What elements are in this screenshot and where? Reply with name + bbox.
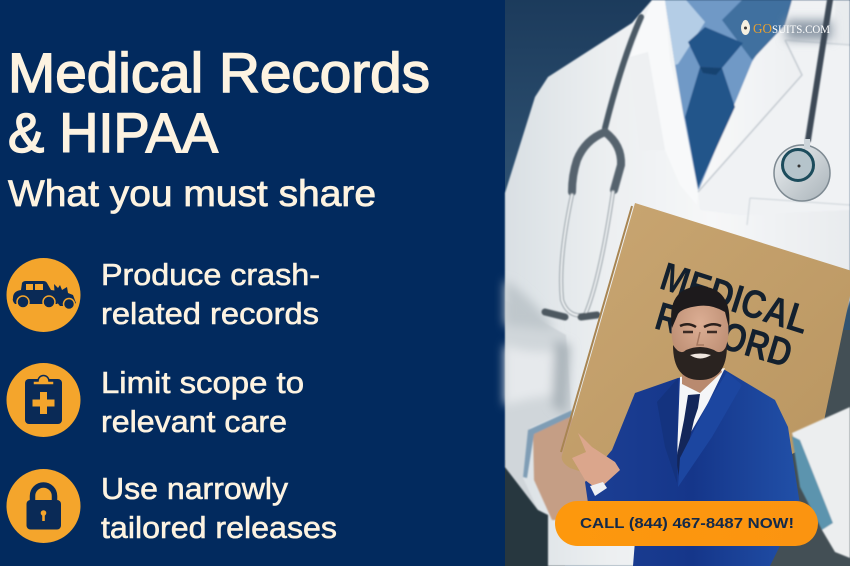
- head: [672, 293, 728, 369]
- suit: [585, 370, 800, 566]
- item text: [101, 365, 304, 439]
- shirt: [665, 0, 792, 192]
- stethoscope: [545, 0, 830, 317]
- panel: doctor photo: [505, 0, 850, 566]
- item text: related records: [101, 296, 319, 331]
- list item: tailored releases: [6, 469, 337, 545]
- medical record folder: RECORD: [650, 294, 797, 376]
- watermark logo: SUITS.COM: [772, 24, 830, 36]
- item text: Use narrowly: [101, 471, 289, 506]
- stethoscope chestpiece: [774, 139, 830, 201]
- item text: relevant care: [101, 404, 287, 439]
- beard: [673, 345, 727, 380]
- subtitle: What you must share: [8, 173, 376, 214]
- watermark logo: [741, 21, 830, 37]
- pointing hand: [572, 433, 620, 490]
- doctor right sleeve and cuff: [792, 407, 850, 558]
- title: Medical Records: [8, 41, 430, 104]
- list item: crash-related records: [6, 257, 320, 332]
- medical record folder: [561, 203, 850, 492]
- soft coat folds: [505, 20, 832, 415]
- eyes and brows: [680, 324, 721, 327]
- left lapel: [657, 378, 678, 483]
- item text: tailored releases: [101, 510, 337, 545]
- item text: Limit scope to: [101, 365, 304, 400]
- panel: navy text panel: [0, 0, 505, 566]
- watermark logo: GO: [753, 22, 772, 37]
- left lapel: [630, 0, 698, 205]
- hair: [671, 286, 729, 328]
- neck shadow: [686, 0, 742, 20]
- doctor coat: [505, 0, 850, 566]
- icon: car crash: [6, 258, 80, 332]
- medical record folder: MEDICAL: [655, 255, 814, 343]
- shirt: [677, 368, 725, 456]
- list item: limit scope: [6, 363, 304, 439]
- icon: medical clipboard: [6, 363, 80, 437]
- neck: [682, 362, 722, 393]
- doctor left hand and cuff: [523, 410, 590, 520]
- right lapel: [698, 0, 850, 215]
- left arm shading: [505, 300, 571, 510]
- item text: Produce crash-: [101, 257, 320, 292]
- nose: [697, 332, 704, 345]
- call to action button: CALL (844) 467-8487 NOW!: [580, 516, 794, 532]
- teeth: [690, 354, 711, 358]
- title: [8, 41, 430, 164]
- attorney figure: [572, 286, 800, 566]
- icon: padlock: [6, 469, 80, 543]
- tie: [676, 394, 700, 482]
- item text: [101, 471, 337, 545]
- call to action button: [555, 501, 818, 546]
- item text: [101, 257, 320, 331]
- title: & HIPAA: [8, 101, 219, 164]
- tie: [685, 27, 743, 188]
- right lapel: [678, 372, 742, 487]
